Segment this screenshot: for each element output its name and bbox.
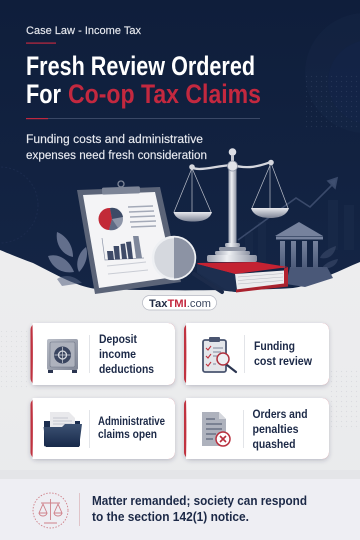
pie chart [98, 208, 123, 230]
footer text [92, 493, 307, 524]
eyebrow red rule [26, 42, 56, 44]
icon: background leaves left [48, 232, 87, 286]
card text [254, 341, 312, 368]
card: administrative claims open [30, 398, 175, 459]
card text: cost review [254, 356, 312, 368]
card text [99, 334, 154, 376]
icon: checklist with magnifier [203, 337, 236, 372]
subtitle: Funding costs and administrative [26, 132, 203, 146]
logo pill [142, 296, 216, 310]
footer band [0, 470, 360, 540]
icon: magnifying glass [153, 237, 222, 292]
eyebrow label: Case Law - Income Tax [26, 25, 141, 37]
title [26, 51, 261, 109]
card text: Funding [254, 341, 295, 353]
icon: safe [47, 339, 78, 373]
title divider [26, 118, 260, 119]
footer text: Matter remanded; society can respond [92, 493, 307, 508]
logo pill: TaxTMI.com [149, 298, 211, 310]
card: deposit income deductions [30, 323, 175, 385]
icon: clipboard report [77, 181, 181, 294]
bar chart [102, 236, 144, 260]
icon: courthouse [275, 222, 338, 287]
header navy panel [0, 0, 360, 290]
card text: Orders and [252, 409, 308, 421]
card text [98, 416, 165, 441]
title: Fresh Review Ordered [26, 51, 255, 81]
card text: deductions [99, 364, 154, 376]
card text: quashed [252, 439, 296, 451]
icon: growth arrow [238, 178, 337, 240]
icon: scales of justice [174, 148, 289, 262]
card text: Deposit [99, 334, 137, 346]
card text: claims open [98, 429, 157, 441]
title: Co-op Tax Claims [68, 79, 261, 109]
footer divider [78, 493, 81, 526]
card text: Administrative [98, 416, 165, 428]
subtitle: expenses need fresh consideration [26, 148, 207, 162]
icon: red law book [197, 262, 288, 292]
title: For [26, 79, 61, 109]
card: orders and penalties quashed [184, 398, 329, 459]
decorative dots [0, 330, 30, 390]
card text: penalties [252, 424, 298, 436]
card text: income [99, 349, 136, 361]
icon: scales in dashed circle [33, 493, 68, 528]
card: funding cost review [184, 323, 329, 385]
footer text: to the section 142(1) notice. [92, 509, 249, 524]
card text [252, 409, 308, 451]
subtitle [26, 132, 207, 162]
icon: folder with papers [44, 412, 82, 447]
icon: rejected document [202, 412, 230, 446]
